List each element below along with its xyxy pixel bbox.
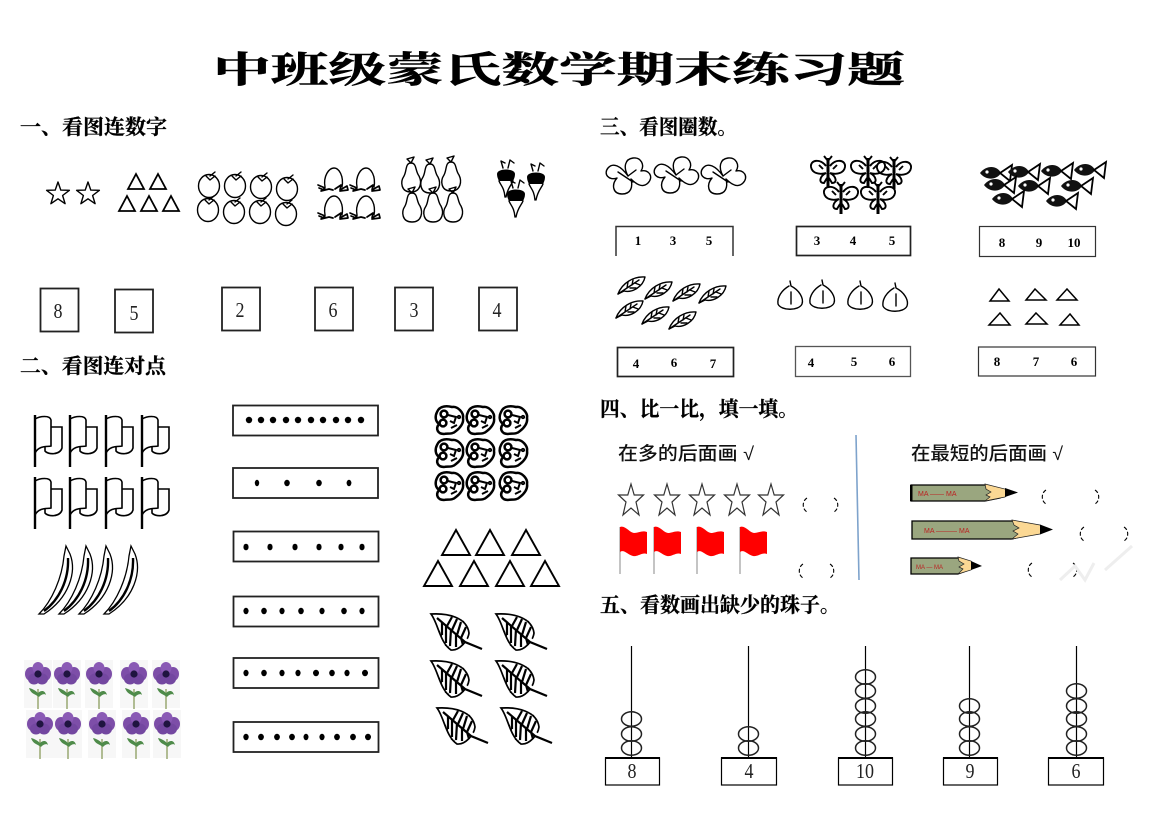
number box 1 3 5: 5 [706, 233, 713, 248]
number box 4 5 6: 5 [851, 354, 858, 369]
number box 4 5 6 [796, 346, 910, 376]
number box 3 4 5: 5 [889, 233, 896, 248]
icon group: 5 butterflies [811, 156, 911, 214]
answer brackets: medium pencil [1042, 490, 1099, 504]
abacus 10 [838, 646, 893, 785]
icon group: 3 flowers [606, 157, 746, 194]
number box 3 4 5 [796, 226, 910, 256]
number box 4: 4 [492, 300, 502, 322]
subheading: tick the shortest: 在最短的后面画 √ [911, 443, 1064, 464]
number box 4 [479, 288, 517, 330]
number box 1 3 5: 3 [670, 233, 677, 248]
heading: section 4: 四、比一比，填一填。 [600, 398, 798, 421]
number box 8 9 10 [980, 226, 1096, 256]
abacus 10: 10 [856, 761, 874, 783]
section 4: compare [600, 398, 1132, 580]
number box 4 5 6: 6 [889, 354, 896, 369]
section 1: count and connect [20, 116, 545, 332]
icon group: 4 red flags [620, 527, 767, 574]
icon group: 5 triangles [119, 174, 179, 211]
number box 8 7 6 [978, 347, 1096, 376]
number box 8 7 6: 7 [1033, 354, 1040, 369]
icon group: 3 radishes [497, 160, 545, 217]
icon: short pencil [911, 557, 982, 574]
number box 4 5 6: 4 [808, 355, 815, 370]
vertical divider [856, 435, 859, 580]
icon group: 5 outlined stars [618, 484, 784, 515]
icon group: 9 fish blobs [436, 406, 527, 500]
number box 3 4 5: 3 [814, 233, 821, 248]
heading: section 3: 三、看图圈数。 [600, 116, 737, 139]
icon group: 2 stars [47, 182, 99, 204]
number box 2: 2 [235, 300, 245, 322]
icon: longest pencil [912, 520, 1053, 539]
icon group: 4 bananas [39, 546, 137, 614]
number box 5: 5 [129, 303, 139, 325]
icon group: 9 fish [980, 162, 1106, 209]
icon group: 10 purple flowers [24, 660, 181, 759]
abacus 4 [721, 646, 777, 785]
abacus 4: 4 [744, 761, 754, 783]
heading: section 1: 一、看图连数字 [20, 116, 167, 139]
abacus 6: 6 [1071, 761, 1081, 783]
dot box: 7 dots [234, 596, 378, 626]
number box 8 [40, 288, 78, 332]
icon: longest pencil: MA ——— MA [924, 528, 970, 535]
number box 2 [222, 288, 260, 330]
answer brackets: flags [799, 564, 834, 578]
icon group: 7 large triangles [424, 530, 559, 586]
icon group: 8 apples [198, 172, 298, 226]
number box 8 7 6: 8 [994, 354, 1001, 369]
dot box: 4 dots [233, 468, 378, 498]
abacus 9: 9 [965, 761, 975, 783]
dot box: 6 dots [234, 532, 378, 562]
section 3: circle the number [600, 116, 1106, 376]
number box 3: 3 [409, 300, 419, 322]
number box 8 9 10: 10 [1068, 235, 1080, 250]
number box 3 [395, 288, 433, 330]
heading: section 2: 二、看图连对点 [20, 355, 168, 378]
number box 8: 8 [53, 301, 63, 323]
number box 6 [315, 288, 353, 330]
section 5: draw missing beads [600, 594, 1104, 785]
number box 8 9 10: 9 [1036, 235, 1043, 250]
number box 8 9 10: 8 [999, 235, 1006, 250]
icon group: 6 veined leaves [431, 614, 552, 744]
subheading: tick the larger count: 在多的后面画 √ [618, 443, 755, 464]
dot box: 9 dots [234, 722, 378, 752]
icon: medium pencil [910, 484, 1018, 501]
icon group: 7 leaves [616, 277, 726, 329]
number box 1 3 5 [616, 226, 733, 256]
title: 中班级蒙氏数学期末练习题 [213, 50, 905, 90]
answer brackets: short pencil [1028, 563, 1077, 577]
icon: short pencil: MA — MA [916, 565, 943, 571]
number box 6: 6 [328, 300, 338, 322]
icon group: 8 flags [35, 415, 169, 529]
abacus 6 [1048, 646, 1104, 785]
number box 8 7 6: 6 [1071, 354, 1078, 369]
number box 5 [115, 290, 153, 332]
faint watermark [1060, 546, 1132, 580]
number box 4 6 7: 7 [710, 356, 717, 371]
number box 3 4 5: 4 [850, 233, 857, 248]
abacus 8 [605, 646, 660, 785]
number box 4 6 7: 4 [633, 356, 640, 371]
icon group: 4 peaches [778, 280, 907, 311]
number box 1 3 5: 1 [635, 233, 641, 248]
icon group: 6 small triangles [989, 289, 1079, 325]
abacus 9 [943, 646, 998, 785]
icon: medium pencil: MA —— MA [918, 491, 957, 498]
icon group: 6 pears [402, 156, 462, 222]
answer brackets: longest pencil [1080, 527, 1128, 541]
heading: section 5: 五、看数画出缺少的珠子。 [600, 594, 840, 617]
icon group: 4 peaches [318, 168, 380, 219]
dot box: 8 dots [234, 658, 378, 688]
answer brackets: stars [803, 498, 838, 512]
number box 4 6 7: 6 [671, 355, 678, 370]
number box 4 6 7 [618, 348, 734, 376]
section 2: match pictures to dots [20, 355, 559, 759]
dot box: 10 dots [233, 406, 378, 436]
abacus 8: 8 [627, 761, 637, 783]
